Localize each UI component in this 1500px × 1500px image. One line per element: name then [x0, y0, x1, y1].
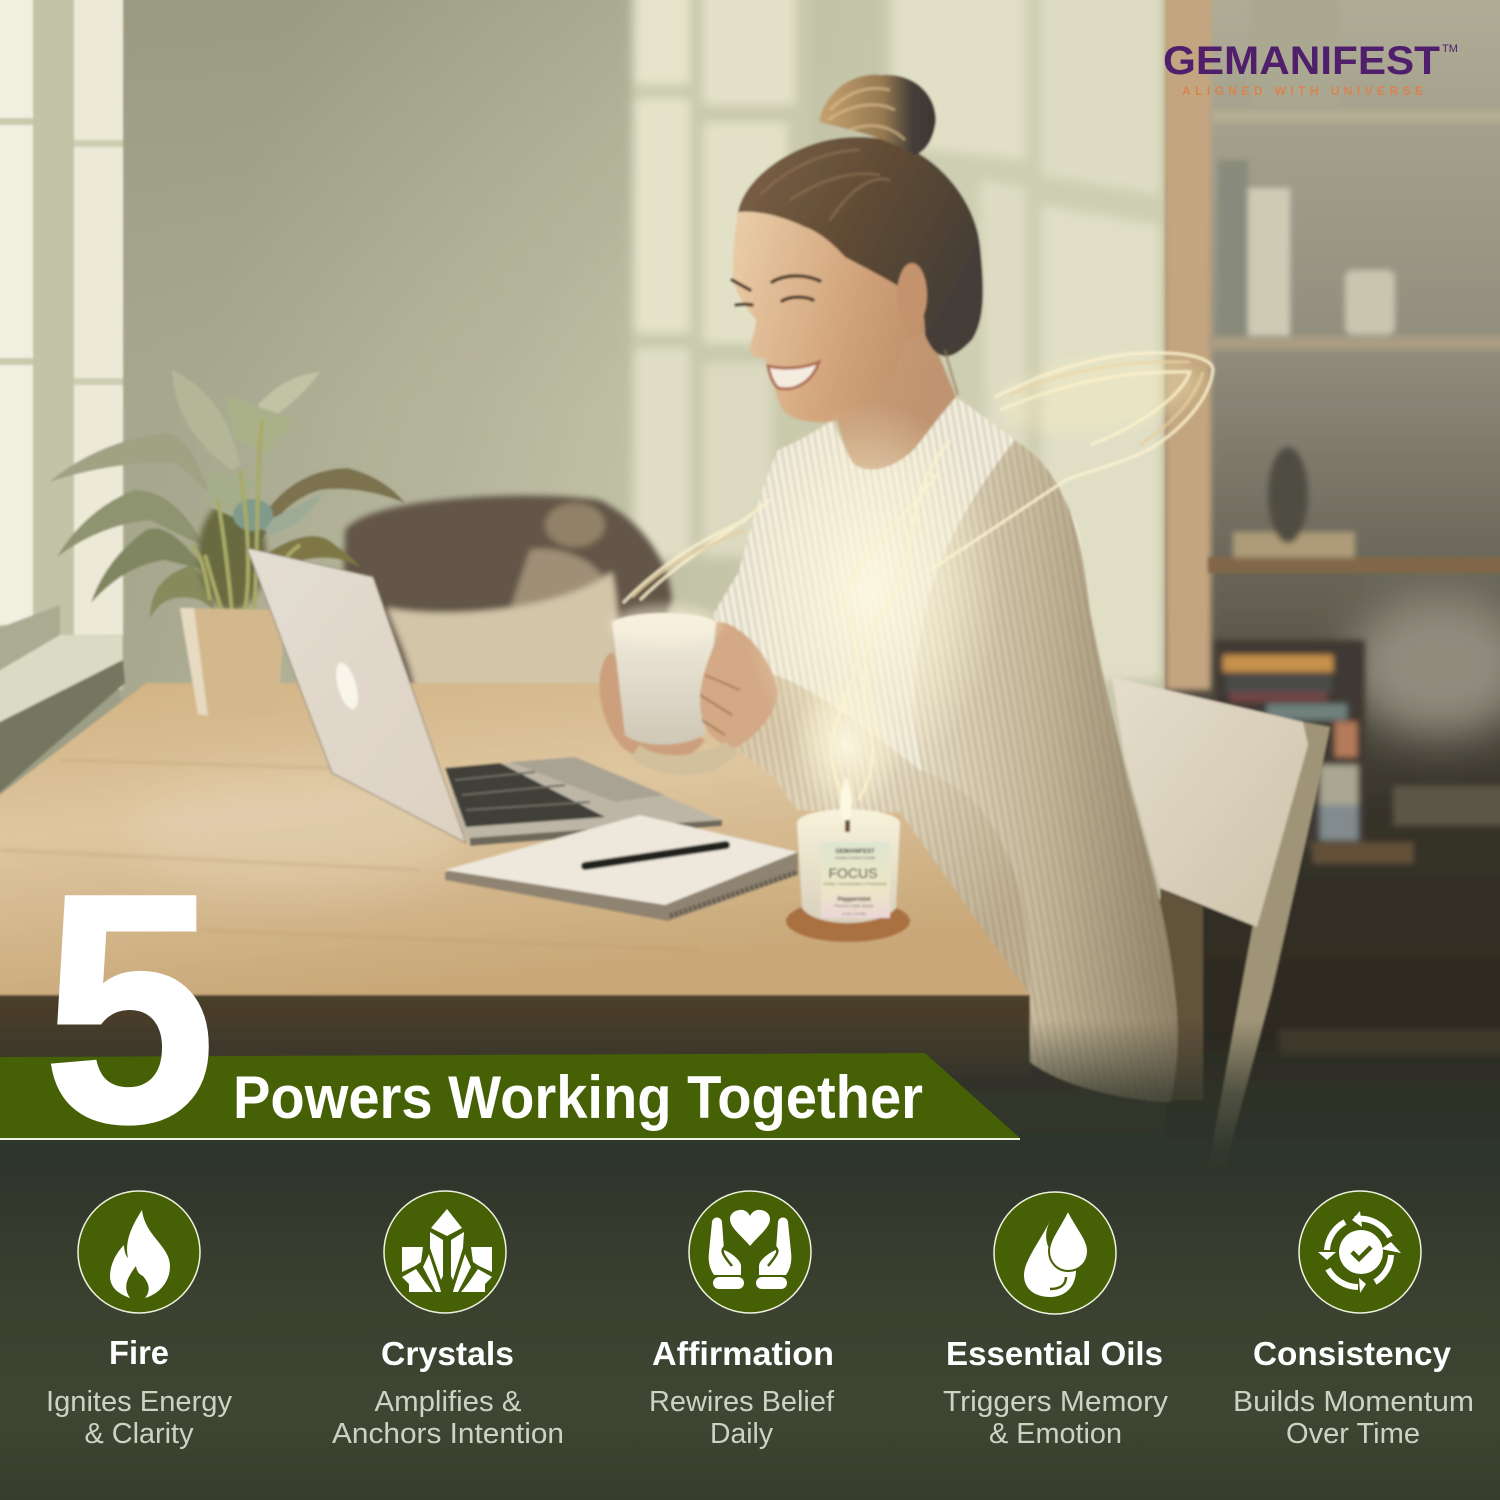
icon: cycle with check — [1299, 1191, 1421, 1313]
power: Crystals — [332, 1191, 564, 1450]
jar label: Clarity | Concentration | Productivity — [823, 881, 887, 886]
upper arm — [914, 440, 1177, 1102]
smile — [768, 362, 819, 389]
icon: hands with heart — [689, 1191, 811, 1313]
neck shadow — [837, 330, 956, 470]
bookshelf — [1165, 0, 1500, 1140]
power: Fire — [46, 1191, 232, 1450]
fingers behind mug — [599, 652, 705, 761]
jar label: Pocmot | Clear Quartz — [834, 903, 874, 908]
candle on coaster — [786, 776, 910, 942]
bottom dark panel — [0, 1170, 1500, 1500]
icon: oil drops — [994, 1192, 1116, 1314]
power: Affirmation — [649, 1191, 835, 1450]
description: Triggers Memory — [943, 1386, 1169, 1418]
sweater body — [714, 397, 1177, 1102]
logo: TM — [1442, 43, 1458, 55]
jar label: Crystal Infused Candle — [835, 855, 876, 860]
heading banner — [0, 827, 1020, 1191]
title: Affirmation — [652, 1335, 834, 1372]
background photo scene — [0, 0, 1500, 1200]
heading text: Powers Working Together — [233, 1064, 923, 1131]
leaves — [49, 370, 405, 618]
mug — [612, 613, 716, 745]
logo — [1163, 39, 1458, 98]
description line 2: & Emotion — [989, 1418, 1122, 1450]
jar label: GEMANIFEST — [835, 849, 875, 855]
laptop — [247, 548, 722, 846]
title: Essential Oils — [946, 1335, 1163, 1372]
eyebrow and eye — [732, 276, 820, 305]
power: Consistency — [1233, 1191, 1474, 1450]
description line 2: Over Time — [1286, 1418, 1420, 1450]
woman — [599, 75, 1177, 1102]
table top — [0, 683, 1030, 1075]
logo: ALIGNED WITH UNIVERSE — [1182, 84, 1423, 98]
pen — [585, 845, 726, 866]
power: Essential Oils — [943, 1192, 1169, 1450]
description: Builds Momentum — [1233, 1386, 1474, 1418]
room wall — [0, 0, 1500, 1200]
description line 2: Anchors Intention — [332, 1418, 564, 1450]
dark fade into footer — [0, 1020, 1500, 1180]
title: Crystals — [381, 1335, 514, 1372]
chair — [1112, 677, 1330, 1185]
sleeve cuff — [631, 742, 738, 775]
wick — [845, 820, 850, 832]
steam glow — [610, 346, 1213, 815]
finger lines — [700, 675, 740, 735]
notebook and pen — [445, 815, 798, 921]
description line 2: Daily — [710, 1418, 773, 1450]
jar label: FOCUS — [828, 865, 878, 881]
hair bun — [819, 75, 936, 155]
logo mark on laptop lid — [332, 660, 362, 712]
sofa with pillows — [340, 495, 672, 690]
logo: GEMANIFEST — [1163, 39, 1440, 83]
jar label — [821, 842, 890, 918]
warm tint — [0, 0, 1500, 1200]
pot — [180, 608, 285, 718]
big number: 5 — [43, 827, 216, 1191]
face and neck — [733, 210, 956, 470]
hair — [738, 137, 983, 356]
flame — [840, 776, 852, 826]
description: Rewires Belief — [649, 1386, 835, 1418]
middle window — [632, 0, 812, 560]
left window — [0, 0, 125, 810]
ear — [897, 263, 927, 327]
right window — [885, 0, 1165, 680]
jar label: Peppermint — [837, 897, 871, 903]
title: Consistency — [1253, 1335, 1452, 1372]
icon: crystal cluster — [384, 1191, 506, 1313]
laptop lid — [247, 548, 466, 843]
description: Ignites Energy — [46, 1386, 232, 1418]
description line 2: & Clarity — [84, 1418, 194, 1450]
bun strands — [828, 88, 905, 140]
jar label: 2 Oz | 12 Hrs — [842, 911, 866, 916]
icon: flame — [78, 1191, 200, 1313]
forearm — [738, 675, 1030, 995]
coaster — [786, 900, 910, 942]
sweater lower torso shadow — [860, 770, 1040, 1062]
jar — [797, 809, 900, 923]
description: Amplifies & — [374, 1386, 522, 1418]
hair strands — [760, 150, 958, 395]
plant in pot — [49, 370, 405, 718]
right hand — [700, 622, 778, 748]
title: Fire — [109, 1334, 169, 1371]
